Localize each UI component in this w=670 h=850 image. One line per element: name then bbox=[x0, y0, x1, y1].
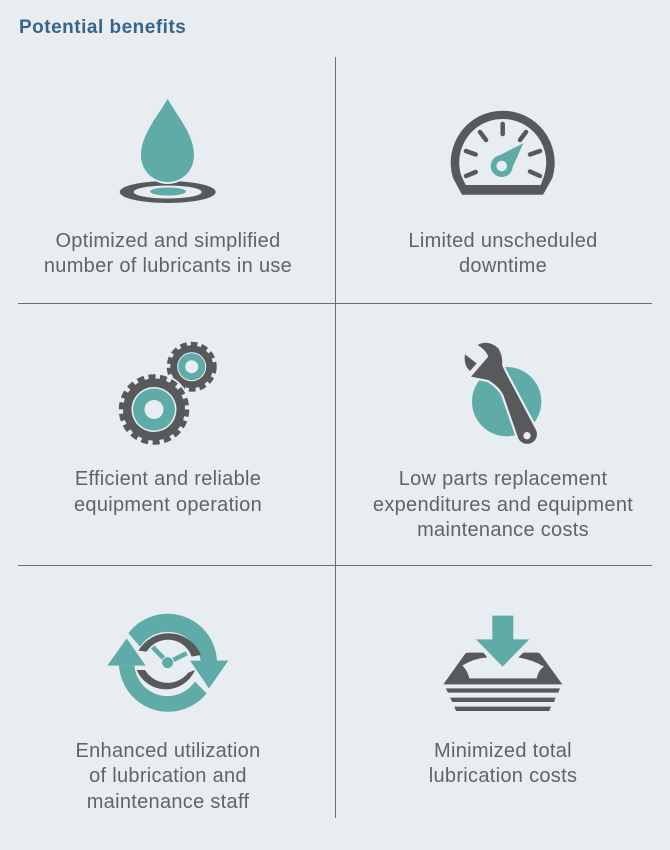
text: lubricants: Optimized and simplified bbox=[55, 230, 281, 252]
text: replacement costs: expenditures and equipment bbox=[373, 494, 633, 516]
title: Potential benefits bbox=[19, 17, 186, 38]
text: lubrication costs bbox=[429, 740, 577, 787]
text: equipment operation bbox=[74, 468, 262, 516]
panel: equipment operation bbox=[74, 344, 262, 516]
panel: downtime bbox=[408, 111, 598, 277]
text: replacement costs: maintenance costs bbox=[417, 519, 589, 541]
text: lubrication costs: Minimized total bbox=[434, 740, 572, 762]
panel: replacement costs bbox=[373, 343, 633, 541]
icon: tray with arrow bbox=[443, 616, 562, 711]
panel: staff utilization bbox=[75, 614, 261, 813]
text: replacement costs: Low parts replacement bbox=[399, 468, 607, 490]
icon: gears bbox=[117, 344, 214, 446]
text: downtime: Limited unscheduled bbox=[408, 230, 598, 252]
panel: lubricants bbox=[44, 99, 292, 277]
text: equipment operation: Efficient and reliable bbox=[75, 468, 261, 490]
text: downtime: downtime bbox=[459, 255, 547, 277]
icon: oil drop bbox=[120, 99, 216, 203]
text: lubricants: number of lubricants in use bbox=[44, 255, 292, 277]
text: equipment operation: equipment operation bbox=[74, 494, 262, 516]
panel: lubrication costs bbox=[429, 616, 577, 787]
text: downtime bbox=[408, 230, 598, 277]
text: staff utilization: maintenance staff bbox=[87, 791, 249, 813]
text: staff utilization bbox=[75, 740, 261, 813]
icon: clock with cycle arrows bbox=[107, 614, 228, 712]
text: staff utilization: of lubrication and bbox=[89, 765, 247, 787]
icon: wrench bbox=[465, 343, 541, 444]
needle bbox=[491, 143, 523, 177]
text: replacement costs bbox=[373, 468, 633, 541]
text: staff utilization: Enhanced utilization bbox=[75, 740, 261, 762]
icon: gauge bbox=[451, 111, 555, 195]
text: lubrication costs: lubrication costs bbox=[429, 765, 577, 787]
text: lubricants bbox=[44, 230, 292, 277]
